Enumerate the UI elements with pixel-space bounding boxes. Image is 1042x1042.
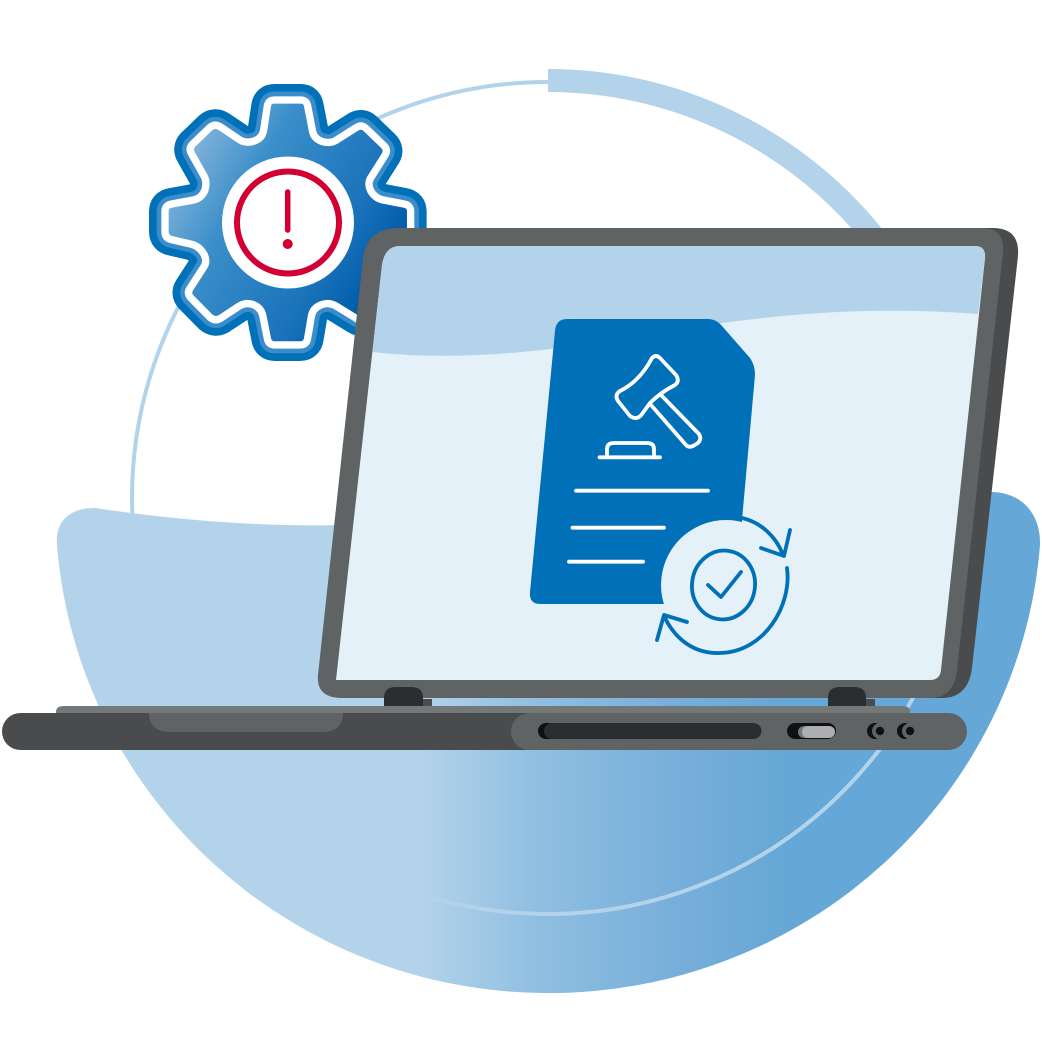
document [530,319,755,604]
icon: refresh check [657,518,790,653]
icon: gear with warning [165,100,411,345]
laptop lid back edge [390,228,1018,698]
laptop screen [336,246,985,680]
document text lines [569,491,708,562]
screen wave [372,246,985,356]
touchpad notch [149,713,343,732]
laptop lid bezel [318,228,1003,698]
icon: gavel [600,356,700,457]
card slot [538,723,578,739]
toggle switch [787,723,836,739]
audio jacks [867,723,883,739]
background blob [57,492,1040,993]
compliance circle backdrop [661,520,791,650]
laptop base [2,706,967,750]
progress ring [132,80,964,914]
laptop hinges [384,687,875,708]
